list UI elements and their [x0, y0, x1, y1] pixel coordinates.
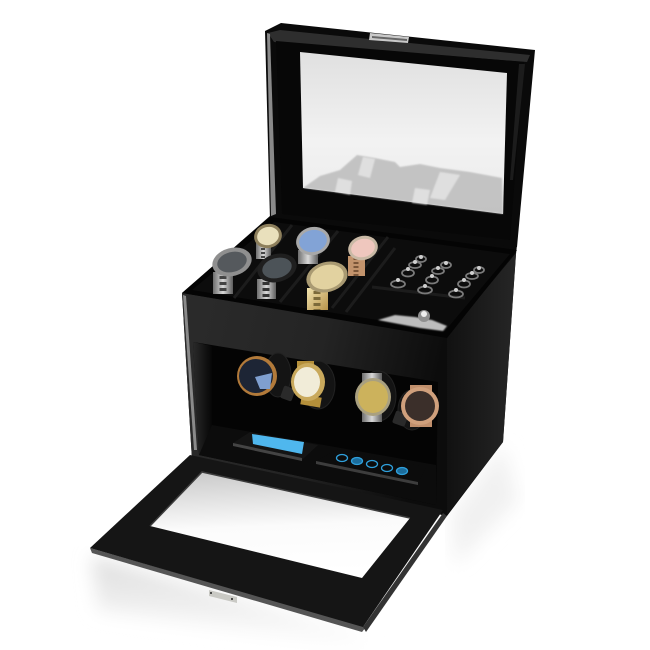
front face — [182, 293, 447, 516]
lid clasp — [369, 33, 409, 43]
winder watch 3: two-tone champagne — [355, 373, 391, 422]
open lid — [265, 23, 535, 247]
upper tray — [182, 217, 517, 338]
winder watch 4: rose gold dark dial — [401, 385, 439, 427]
winder watch 2: gold white dial — [291, 361, 325, 408]
winder clasp blocks — [280, 385, 409, 427]
winder watch 1: dark dial rose gold — [237, 356, 277, 396]
tray dividers — [234, 225, 465, 312]
touch button panel — [316, 449, 426, 485]
floor reflection — [92, 445, 518, 648]
lid glass window — [300, 52, 507, 214]
watch: blue dial — [293, 224, 333, 264]
watch: gold chronograph — [303, 257, 351, 310]
watch: rose gold pink dial — [345, 233, 381, 276]
ring compartment — [391, 255, 484, 298]
open front door — [90, 455, 447, 632]
winder compartment — [193, 342, 439, 505]
box silhouette backing — [182, 216, 517, 516]
right side of box — [446, 253, 516, 516]
door clasp — [209, 590, 237, 603]
jewellery compartment — [378, 310, 447, 331]
reflected watches — [303, 155, 503, 214]
watch: grey bezel steel — [209, 243, 255, 294]
LCD control panel — [233, 432, 318, 461]
watch: black bezel steel — [254, 249, 300, 299]
watch: champagne steel — [251, 221, 285, 259]
door glass window — [150, 472, 410, 578]
winder pillows — [265, 353, 426, 430]
